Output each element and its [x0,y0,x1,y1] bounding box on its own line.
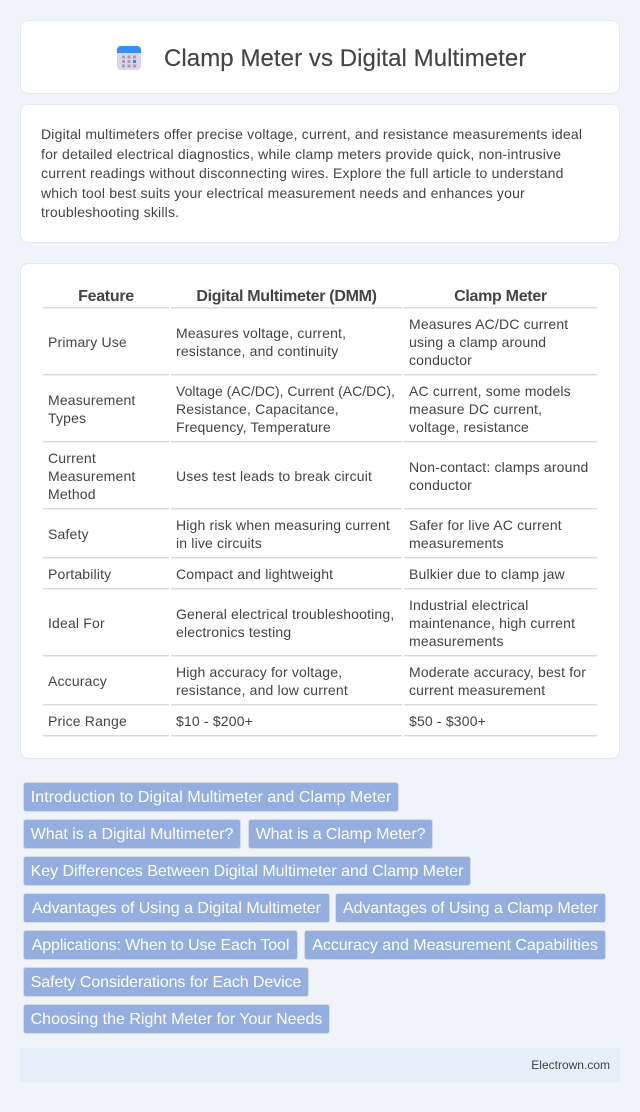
Measurement Types: DMM: Voltage (AC/DC), Current (AC/DC), [176,383,395,399]
Safety: DMM: in live circuits [176,535,262,551]
Primary Use: clamp: Measures AC/DC current [409,316,568,332]
Method: clamp: conductor [409,477,472,493]
tag: accuracy [304,930,606,960]
Accuracy: DMM: resistance, and low current [176,682,348,698]
title card [20,20,620,94]
Ideal For: DMM: electronics testing [176,624,291,640]
row: Portability: Portability [48,566,111,582]
comparison table [43,288,597,737]
section link tags [23,782,606,1034]
tag: safety: Safety Considerations for Each Device [31,974,301,991]
Primary Use: clamp: conductor [409,352,472,368]
Price Range: DMM: $10 - $200+ [176,713,253,729]
Price Range: clamp: $50 - $300+ [409,713,486,729]
Measurement Types: clamp: voltage, resistance [409,419,529,435]
tag: what is a clamp meter: What is a Clamp Meter? [256,826,425,843]
intro text card [20,104,620,243]
tag: what is a digital multimeter [23,819,241,849]
Ideal For: clamp: Industrial electrical [409,597,529,613]
Measurement Types: clamp: measure DC current, [409,401,542,417]
tag: introduction: Introduction to Digital Multimeter and Clamp Meter [31,789,391,806]
Measurement Types: clamp: AC current, some models [409,383,571,399]
header: Feature: Feature [78,288,134,305]
intro paragraph: for detailed electrical diagnostics, while clamp meters provide quick, non-intrusive [41,146,561,162]
Primary Use: DMM: Measures voltage, current, [176,325,346,341]
tag: key differences: Key Differences Between Digital Multimeter and Clamp Meter [31,863,463,880]
intro paragraph: which tool best suits your electrical measurement needs and enhances your [41,184,525,200]
tag: advantages of clamp meter: Advantages of Using a Clamp Meter [343,900,598,917]
tag: introduction [23,782,399,812]
intro paragraph: troubleshooting skills. [41,204,179,220]
Portability: clamp: Bulkier due to clamp jaw [409,566,565,582]
row: Measurement Types [48,392,136,426]
Ideal For: clamp: measurements [409,633,504,649]
Measurement Types: DMM: Frequency, Temperature [176,419,331,435]
title: Clamp Meter vs Digital Multimeter [164,45,526,72]
row: Current Measurement Method: Current [48,450,96,466]
Measurement Types: DMM [176,383,395,435]
row: Primary Use: Primary Use [48,334,127,350]
tag: applications: Applications: When to Use Each Tool [32,937,289,954]
Primary Use: clamp [409,316,568,368]
intro paragraph [41,126,582,220]
Accuracy: clamp: current measurement [409,682,545,698]
Safety: DMM [176,517,390,551]
tag: accuracy: Accuracy and Measurement Capabilities [312,937,598,954]
tag: applications [23,930,298,960]
Accuracy: clamp: Moderate accuracy, best for [409,664,586,680]
Ideal For: clamp: maintenance, high current [409,615,575,631]
header: Clamp Meter: Clamp Meter [454,288,547,305]
tag: advantages of multimeter [23,893,330,923]
row: Accuracy: Accuracy [48,673,107,689]
row: Ideal For: Ideal For [48,615,105,631]
footer credit: Electrown.com [531,1058,610,1072]
tag: what is a digital multimeter: What is a Digital Multimeter? [31,826,233,843]
tag: what is a clamp meter [248,819,433,849]
Method: clamp: Non-contact: clamps around [409,459,589,475]
Method: clamp [409,459,589,493]
header: Digital Multimeter (DMM): Digital Multimeter (DMM) [196,288,377,305]
comparison table card [20,263,620,759]
row: Price Range: Price Range [48,713,127,729]
row: Current Measurement Method [48,450,136,502]
row: Measurement Types: Types [48,410,86,426]
Ideal For: DMM: General electrical troubleshooting, [176,606,394,622]
intro paragraph: Digital multimeters offer precise voltage, current, and resistance measurements ideal [41,126,582,142]
tag: advantages of multimeter: Advantages of Using a Digital Multimeter [32,900,321,917]
Accuracy: DMM: High accuracy for voltage, [176,664,342,680]
row: Current Measurement Method: Measurement [48,468,135,484]
Safety: clamp: Safer for live AC current [409,517,562,533]
Safety: clamp [409,517,562,551]
intro paragraph: current readings without disconnecting wires. Explore the full article to understand [41,165,564,181]
Accuracy: DMM [176,664,348,698]
row: Current Measurement Method: Method [48,486,96,502]
tag: advantages of clamp meter [335,893,606,923]
Safety: clamp: measurements [409,535,504,551]
tag: key differences [23,856,471,886]
Measurement Types: DMM: Resistance, Capacitance, [176,401,339,417]
row: Measurement Types: Measurement [48,392,135,408]
Measurement Types: clamp [409,383,571,435]
Portability: DMM: Compact and lightweight [176,566,333,582]
Safety: DMM: High risk when measuring current [176,517,390,533]
Ideal For: clamp [409,597,575,649]
Ideal For: DMM [176,606,394,640]
Primary Use: DMM [176,325,346,359]
Primary Use: DMM: resistance, and continuity [176,343,338,359]
icon: calendar grid [117,46,141,70]
Accuracy: clamp [409,664,586,698]
Primary Use: clamp: using a clamp around [409,334,546,350]
footer bar [20,1048,620,1082]
tag: safety [23,967,309,997]
tag: choosing: Choosing the Right Meter for Your Needs [31,1011,322,1028]
Method: DMM: Uses test leads to break circuit [176,468,372,484]
tag: choosing [23,1004,330,1034]
row: Safety: Safety [48,526,89,542]
